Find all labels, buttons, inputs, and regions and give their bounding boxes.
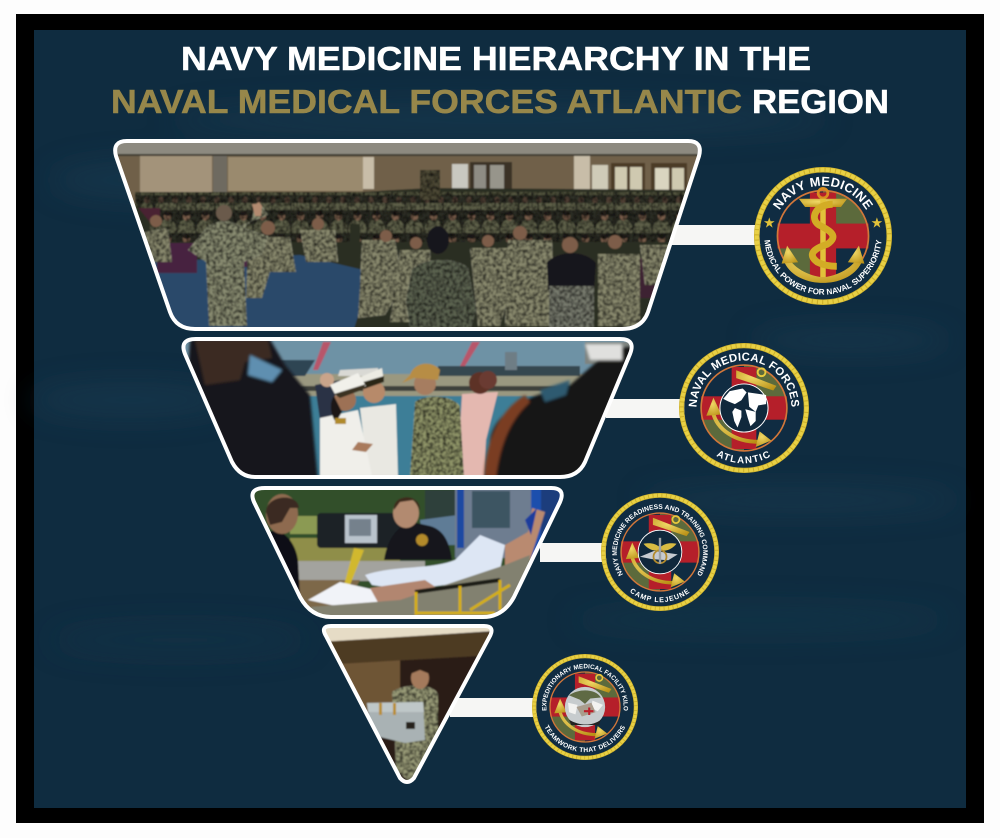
- connector bar 3: [540, 543, 610, 562]
- patient and sheet: [505, 508, 545, 570]
- panel outline 4: [324, 626, 492, 782]
- badge: Navy Medicine: MEDICAL POWER FOR NAVAL SUPERIORITY: [764, 240, 882, 295]
- connector bar 1: [672, 225, 762, 245]
- icon: world globe: [720, 384, 768, 432]
- badge: Navy Medicine Readiness and Training Command Camp Lejeune: NAVY MEDICINE READINESS AND TRAINING COMMAND: [612, 504, 708, 576]
- pier: [270, 374, 590, 396]
- panel: photo of medics with patient on stretcher: [245, 488, 570, 618]
- left medic: [270, 530, 300, 593]
- badge: Expeditionary Medical Facility Kilo: EXPEDITIONARY MEDICAL FACILITY KILO: [542, 664, 628, 711]
- panel: photo of assembled sailors raising hands: [110, 140, 710, 335]
- standing sailor, back view: [188, 204, 268, 326]
- badge: Navy Medicine: [754, 167, 892, 305]
- officers in white: [360, 404, 398, 476]
- title: NAVY MEDICINE HIERARCHY IN THE: [181, 40, 811, 77]
- icon: stars: ★: [871, 216, 883, 231]
- badge: Navy Medicine Readiness and Training Command Camp Lejeune: CAMP LEJEUNE: [630, 588, 690, 602]
- icon: anchor and serpent: [782, 188, 864, 283]
- child and sleeve: [315, 380, 345, 420]
- panel outline 3: [252, 488, 562, 617]
- panel outline 2: [183, 339, 632, 477]
- crowd base: [130, 188, 700, 335]
- badge: Naval Medical Forces Atlantic: [679, 343, 809, 473]
- badge: Navy Medicine Readiness and Training Command Camp Lejeune: [601, 493, 719, 611]
- badge: Expeditionary Medical Facility Kilo: TEAMWORK THAT DELIVERS: [545, 724, 625, 752]
- crowd rows: [135, 170, 695, 242]
- icon: wings and ship's wheel: [638, 530, 682, 574]
- maroon chairs: [138, 208, 160, 222]
- panel outline 1: [115, 141, 700, 329]
- badge: Naval Medical Forces Atlantic: NAVAL MEDICAL FORCES: [688, 352, 800, 407]
- connector bar 2: [606, 399, 688, 418]
- panel: photo of officers on the pier: [180, 339, 640, 480]
- badge: Expeditionary Medical Facility Kilo: [532, 654, 638, 760]
- title: [111, 40, 889, 120]
- sailor: [392, 686, 438, 782]
- pink dress woman: [458, 392, 498, 478]
- title: NAVAL MEDICAL FORCES ATLANTIC: [111, 83, 742, 120]
- icon: globe with medical case: [565, 687, 605, 727]
- grey case: [367, 702, 425, 743]
- connector bar 4: [450, 698, 540, 717]
- faces: [150, 215, 622, 253]
- sailor in foreground, back view: [406, 260, 476, 330]
- centre medic: [384, 522, 452, 560]
- panel: photo of sailor unloading a case from a container: [320, 626, 495, 786]
- sailor in green camo with tan cap: [410, 396, 464, 476]
- black jacket sailor: [547, 253, 596, 290]
- badge: Navy Medicine: NAVY MEDICINE: [772, 176, 874, 210]
- icon: stars: ★: [763, 216, 775, 231]
- icon: stars: [763, 216, 883, 231]
- title: REGION: [752, 83, 889, 120]
- seated front sailors: [145, 228, 675, 326]
- right blurred person: [484, 344, 640, 480]
- badge: Naval Medical Forces Atlantic: ATLANTIC: [716, 451, 770, 464]
- left blurred person: [186, 339, 318, 480]
- ambulance: [455, 488, 535, 558]
- carpet: [154, 254, 362, 327]
- monitor: [317, 513, 403, 548]
- stretcher: [310, 555, 530, 618]
